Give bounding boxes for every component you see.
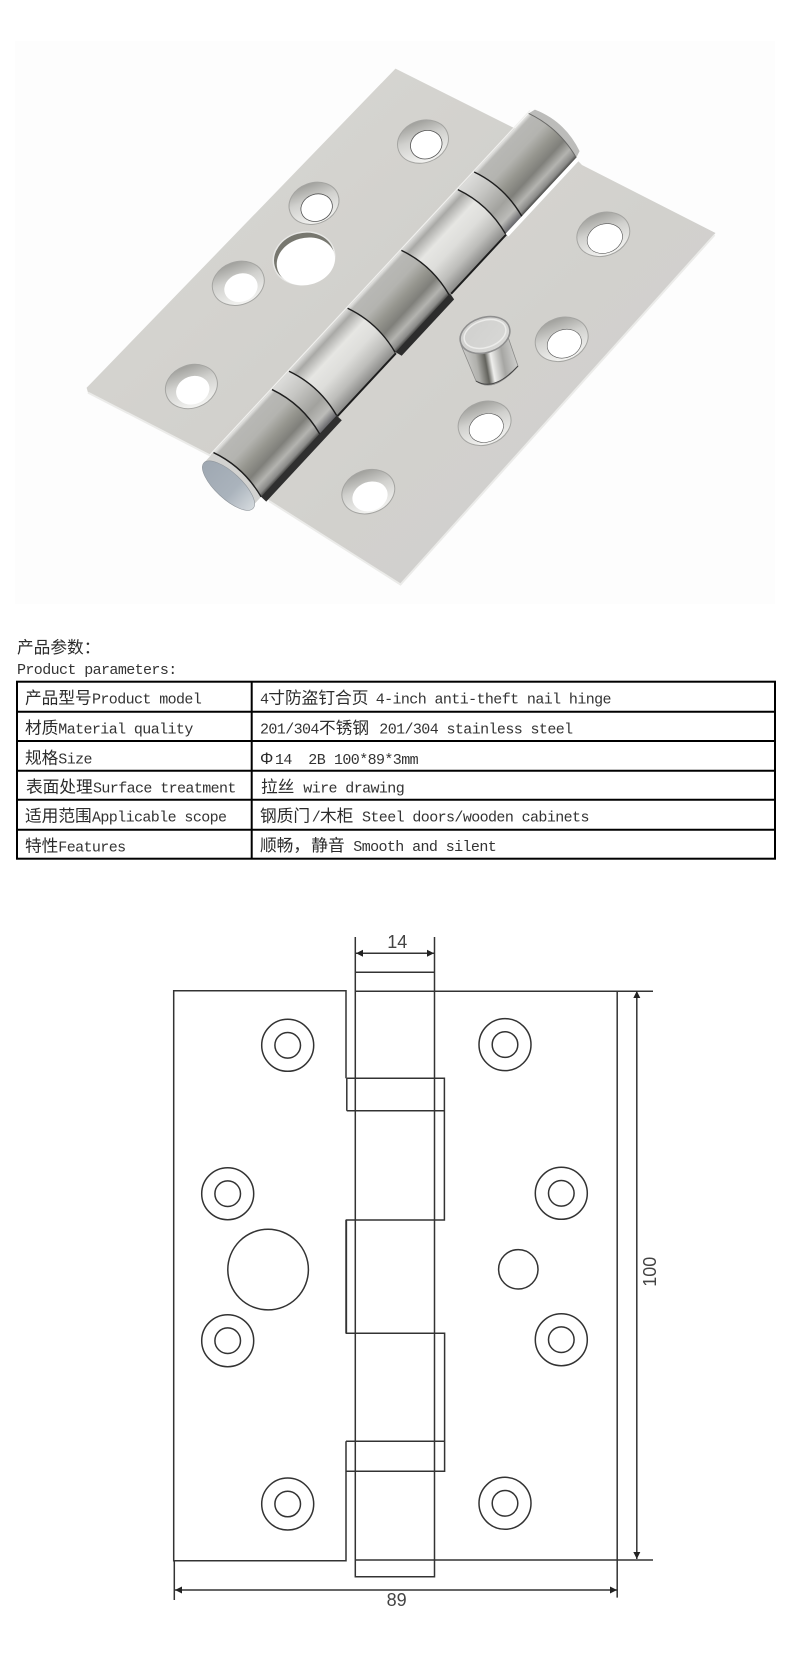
row: features: Features <box>58 840 126 856</box>
row: product model: Product model <box>92 692 202 708</box>
row: product model: 4-inch anti-theft nail hinge <box>376 692 612 708</box>
row: size: 14 <box>275 752 292 769</box>
row: material quality: 不锈钢 <box>319 718 369 738</box>
row: applicable scope: 木柜 <box>320 807 353 826</box>
screw hole: left plate 1 <box>391 113 455 170</box>
right leaf screw holes <box>479 1019 587 1529</box>
row: material quality: 201/304 stainless steel <box>379 722 573 738</box>
hinge barrel <box>194 103 590 521</box>
dimension: 14: 14 <box>387 932 407 952</box>
row: size: 100*89*3mm <box>334 752 419 769</box>
dimension: 100: 100 <box>640 1257 660 1287</box>
left leaf outline <box>174 991 347 1561</box>
dimension: 14 <box>356 932 434 957</box>
row: product model: 4 <box>260 692 269 708</box>
row: features: 静音 <box>311 836 345 855</box>
end cap <box>195 453 262 518</box>
row: applicable scope <box>25 807 589 827</box>
parameter table <box>17 682 775 859</box>
hinge pin <box>355 937 434 1577</box>
screw hole: right plate 3 <box>452 394 517 453</box>
row: features: 特性 <box>25 836 58 856</box>
large round hole <box>267 225 341 292</box>
screw hole: left plate 2 <box>283 175 345 231</box>
left leaf screw holes <box>202 1019 314 1530</box>
left hinge plate <box>87 69 522 458</box>
section heading: product parameters: 产品参数： <box>17 638 100 657</box>
row: material quality: 201/304 <box>260 722 319 738</box>
row: material quality: 材质 <box>25 718 58 738</box>
row: size: Φ <box>260 749 273 768</box>
small centre hole <box>499 1250 538 1289</box>
row: features: 顺畅， <box>260 836 310 855</box>
row: size <box>25 749 419 769</box>
row: applicable scope: 适用范围 <box>25 807 92 826</box>
row: product model <box>25 688 612 708</box>
row: surface treatment: wire drawing <box>303 781 404 798</box>
row: surface treatment: 表面处理 <box>26 778 93 797</box>
dimension: 100 <box>633 991 660 1559</box>
row: surface treatment <box>26 778 404 798</box>
row: surface treatment: Surface treatment <box>93 781 236 798</box>
row: surface treatment: 拉丝 <box>261 778 294 797</box>
dimension: 89: 89 <box>387 1590 407 1610</box>
security stud <box>455 310 518 385</box>
right leaf outline <box>355 991 653 1598</box>
row: size: Size <box>58 752 93 769</box>
row: material quality: Material quality <box>58 722 193 738</box>
large centre hole <box>228 1229 308 1310</box>
screw hole: left plate 3 <box>206 254 271 313</box>
row: size: 2B <box>308 752 326 769</box>
row: applicable scope: Steel doors/wooden cabinets <box>362 810 589 827</box>
screw hole: left plate 4 <box>159 357 224 416</box>
row: material quality <box>25 718 573 738</box>
row: applicable scope: 钢质门 <box>260 807 310 826</box>
row: product model: 寸防盗钉合页 <box>268 688 368 708</box>
section heading: product parameters: Product parameters: <box>17 662 177 679</box>
table grid <box>17 682 775 859</box>
dimension: 89 <box>174 1560 617 1610</box>
screw hole: right plate 2 <box>529 310 594 369</box>
product photo: stainless steel hinge <box>15 41 775 604</box>
row: features: Smooth and silent <box>353 839 496 856</box>
technical drawing <box>174 932 660 1610</box>
row: applicable scope: Applicable scope <box>92 810 227 827</box>
screw hole: right plate 4 <box>336 462 401 521</box>
row: size: 规格 <box>25 749 59 768</box>
row: product model: 产品型号 <box>25 688 92 708</box>
row: applicable scope: / <box>312 810 321 827</box>
section heading: product parameters <box>17 638 177 679</box>
right hinge plate <box>262 158 716 586</box>
knuckles <box>346 1078 445 1471</box>
row: features <box>25 836 496 856</box>
screw hole: right plate 1 <box>571 205 636 264</box>
